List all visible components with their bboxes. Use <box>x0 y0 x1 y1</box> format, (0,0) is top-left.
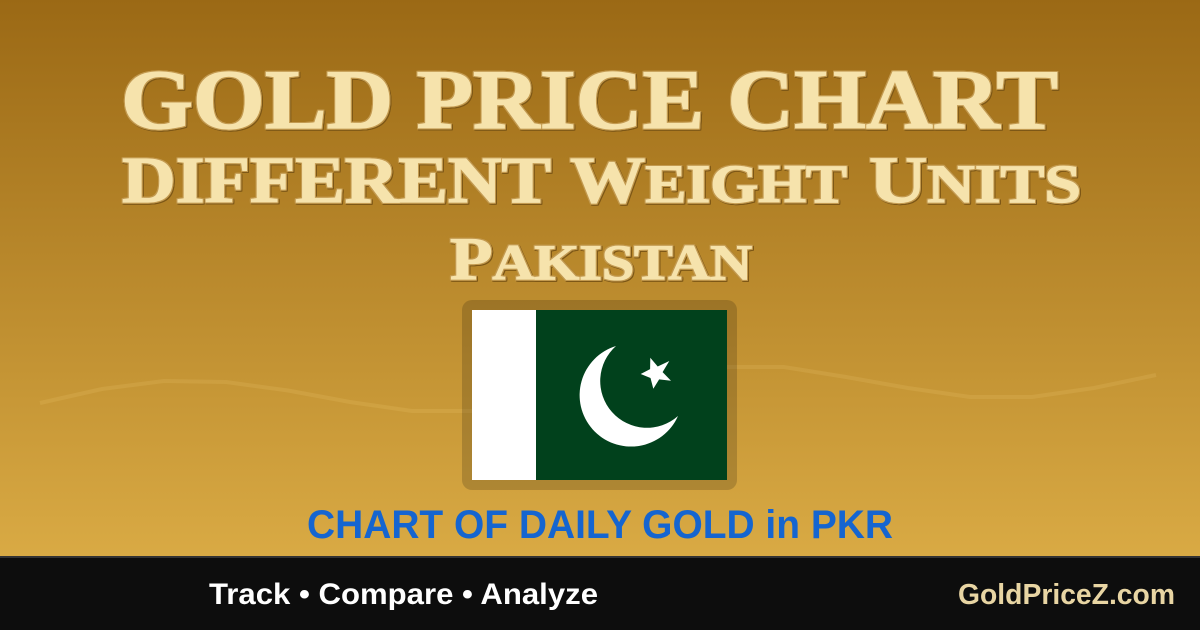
flag green field <box>536 310 727 480</box>
flag of Pakistan <box>472 310 727 480</box>
crescent <box>580 346 678 447</box>
brand name: GoldPriceZ.com <box>958 579 1175 611</box>
subtitle: CHART OF DAILY GOLD in PKR <box>307 503 893 547</box>
title line 3: country: PAKISTAN <box>450 226 752 292</box>
tagline: Track • Compare • Analyze <box>209 578 598 611</box>
footer top border <box>0 556 1200 558</box>
title line 2: different: DIFFERENT <box>122 144 551 217</box>
star <box>641 358 671 389</box>
footer bar <box>0 556 1200 630</box>
flag frame <box>462 300 737 490</box>
flag white band <box>472 310 536 480</box>
title line 2: units: UNITS <box>869 144 1081 217</box>
title line 1: GOLD PRICE CHART <box>121 53 1058 147</box>
footer background <box>0 558 1200 630</box>
title line 2: weight: WEIGHT <box>570 144 847 217</box>
faint price line <box>40 367 1156 411</box>
title <box>121 53 1081 292</box>
